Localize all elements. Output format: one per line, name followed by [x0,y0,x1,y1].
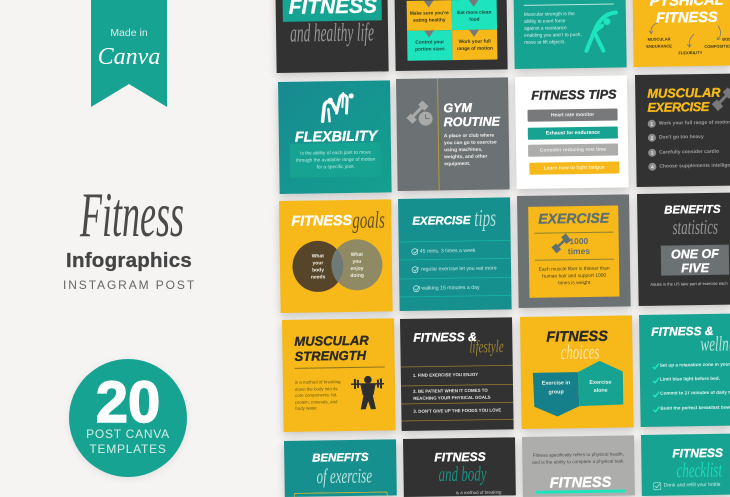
script: lifestyle: lifestyle [470,337,504,357]
body text [532,451,625,465]
body text: protein, minerals, and [295,398,337,404]
heading: gym routine: ROUTINE [444,114,500,129]
quadrant text 1 [410,11,449,23]
tip bar 2 [528,126,618,139]
heading: gym routine [443,101,500,129]
subtitle: Instagram Post: INSTAGRAM POST [63,278,196,292]
title: Infographics: Infographics [66,249,192,272]
body text: you can go to exercise [444,141,497,146]
panel: fitness and lifestyle [400,317,514,430]
panel: muscular exercise [634,73,730,187]
label: muscular endurance [646,36,672,48]
panel: muscular strength [282,318,395,431]
tip bar 3: Consider reducing rest time [540,146,606,153]
script: and body: and body [438,461,486,486]
divider line [524,4,614,6]
script: tips: tips [474,206,496,232]
list item 1: 1. FIND EXERCISE YOU ENJOY [413,371,478,377]
step markers: 4 [650,164,654,170]
venn text left: What [312,252,324,259]
step markers [648,120,656,171]
stat: 1000 times: 1000 [570,236,589,246]
script: and healthy life: and healthy life [290,18,375,47]
heading: flexibility: FLEXBILITY [295,128,377,145]
quadrant text 3: Control your [416,40,445,46]
heading: muscular exercise [647,84,720,115]
tip bar 4 [529,161,619,174]
body text: equipment. [444,162,470,167]
divider [535,232,614,234]
script: goals: goals [352,208,385,234]
panel: fitness and wellness [639,314,730,427]
badge text: POST CANVA [86,426,170,440]
heading: fitness and: FITNESS & [413,329,477,344]
title script: Fitness: Fitness [80,180,184,250]
yellow inner panel [528,206,620,298]
body text: Fitness specifically refers to physical health, [533,451,624,458]
heading: gym routine: GYM [443,101,472,115]
outlined box [294,491,388,496]
panel: physical fitness [632,0,730,67]
body text: A place or club where [444,134,494,139]
checkbox [653,482,662,490]
quadrant pointers [424,0,479,38]
panel: fitness choices [520,315,634,429]
heading: physical fitness [650,0,724,27]
quadrant text 4 [457,39,493,52]
ribbon: Made in Canva [91,0,167,107]
box text: through the available range of motion [296,157,375,163]
badge text: TEMPLATES [89,442,167,456]
quadrant: eating healthy [407,0,452,31]
heading: fitness: FITNESS [546,328,608,345]
body text: move or lift objects. [525,40,566,45]
heading: physical fitness: FITNESS [656,10,718,27]
arrows [648,22,722,48]
tip bar 1: Heart rate monitor [551,111,594,118]
venn text right: What [351,251,363,257]
check icons [411,248,420,292]
venn text left: your [313,260,324,266]
heading: muscular exercise: EXERCISE [647,99,709,115]
venn text left: body [312,267,324,273]
panel: fitness and body [403,437,516,496]
venn text left: needs [311,274,326,280]
body text [524,12,582,45]
heading: fitness: FITNESS [291,212,353,229]
stat: 1000 times: times [568,245,590,256]
heading: fitness: FITNESS [550,474,612,491]
script: statistics: statistics [672,214,718,239]
body text: core components: fat, [295,392,337,397]
venn text right: you [353,258,362,264]
heading: benefits: BENEFITS [312,451,369,464]
body text: Each muscle fiber is thinner than [539,267,610,273]
script: choices: choices [560,339,600,364]
panel: muscular strength definition [513,0,627,69]
panel: Fitness and healthy life [275,0,389,73]
list item 2: REACHING YOUR PHYSICAL GOALS [413,394,491,400]
body text [539,266,610,287]
heading: fitness: FITNESS [434,449,486,464]
box text [296,150,375,170]
panel: flexibility [278,80,392,193]
heading: exercise: EXERCISE [413,214,471,227]
tip bar 2: Exhaust for endurance [546,129,600,136]
tip text 3: walking 15 minutes a day [422,284,480,291]
list item 2 [413,387,491,400]
label: body composition [704,37,730,48]
body text: down the body into its [295,385,337,391]
option: exercise alone: alone [594,387,608,394]
quadrant text 2: Eat more clean [458,11,492,16]
step text 2: Don't go too heavy [658,134,703,140]
quadrant text 1: Make sure you're [410,11,449,17]
label: muscular endurance: MUSCULAR [648,36,671,42]
quadrant: range of motion [452,29,498,60]
checklist item: Drink and refill your bottle [664,482,721,489]
option: exercise in group: Exercise in [542,380,570,386]
body text: against a resistance [524,26,567,31]
body text: ability to exert force [524,19,566,24]
body text: is a method of breaking [455,489,501,495]
stat box: one of five [660,245,729,276]
quadrant text 3 [415,40,445,52]
icon: dumbbell and clock [406,100,432,126]
panel: benefits of exercise [284,439,397,496]
heading: muscular strength: STRENGTH [294,347,366,363]
quadrant text 1: eating healthy [414,18,446,23]
venn text right: enjoy [351,265,364,272]
check marks [652,363,660,413]
icon: dumbbell [552,234,571,254]
heading: muscular strength [294,332,369,363]
badge: 20 post Canva templates [69,358,187,476]
divider [535,259,614,261]
icon: stretching figure [584,10,618,53]
tip bar 4: Learn how to fight fatigue [544,164,605,171]
icon: two stretching figures [320,92,354,124]
body text: enabling you and I to push, [524,32,582,38]
label: muscular endurance: ENDURANCE [647,43,672,48]
heading: muscular strength: MUSCULAR [294,332,368,348]
divider lines [398,240,512,298]
body text: weights, and other [444,155,487,160]
box text: for a specific joint. [317,164,355,170]
panel: gym routine [396,77,510,191]
body text [295,379,340,411]
accent bar [536,489,625,493]
heading: fitness: FITNESS [672,446,723,461]
badge number: 20 [96,370,160,434]
heading: muscular exercise: MUSCULAR [647,84,720,101]
quadrant text 4: Work your full [459,40,491,45]
quadrant: portion sizes [407,30,453,61]
tip bar 3 [528,143,618,156]
option: exercise alone: Exercise [589,379,612,386]
box text: Is the ability of each joint to move [300,150,371,156]
script: of exercise: of exercise [316,463,372,488]
panel: fitness checklist [641,434,730,496]
panel: fitness athletic [522,435,635,497]
heading: fitness tips: FITNESS TIPS [531,87,617,102]
list item 2: Limit blue light before bed. [660,376,720,382]
tip bar 1 [527,108,618,121]
quadrant text 4: range of motion [457,46,493,52]
stat: 1000 times [568,236,590,256]
stat text: FIVE [681,260,709,275]
panel: exercise tips [398,197,512,311]
body text: is a method of breaking [295,379,340,384]
body text: human hair and support 1000 [543,274,606,280]
body text [444,133,497,167]
body text: body water. [295,405,318,410]
quadrant text 2: food [470,17,480,22]
step text 1: Work your full range of motion [658,119,730,126]
text box [290,142,381,177]
heading: exercise: EXERCISE [539,210,610,227]
venn diagram [292,239,382,292]
accent line [436,78,439,190]
panel: fitness goals [279,199,393,312]
badge text [86,426,170,456]
icon: dumbbell [712,88,730,111]
heading band [283,0,382,22]
stat text: ONE OF [671,246,719,261]
icon: weightlifter [350,376,384,410]
panel: benefits statistics [637,193,730,306]
hexagon shapes [532,360,624,416]
option: exercise in group [542,380,570,395]
divider [294,366,384,368]
heading: benefits: BENEFITS [664,204,720,217]
divider lines [400,364,514,422]
body text: Muscular strength is the [524,12,575,17]
option: exercise in group: group [548,389,564,395]
step markers: 2 [650,135,653,141]
quadrant text 3: portion sizes [415,47,445,52]
venn text left [311,252,326,280]
stat text [671,246,720,275]
venn text right [350,251,364,279]
step markers: 3 [650,150,653,156]
quadrant text 2 [458,10,492,22]
tip text 1: 45 mins, 3 times a week [420,247,476,254]
quadrant: clean food [452,0,497,30]
step markers: 1 [650,121,653,127]
panel: exercise 1000 times [517,194,631,308]
heading: fitness and: FITNESS & [651,324,714,339]
body text: using machines, [444,148,482,153]
label: flexibility: FLEXIBILITY [679,50,703,55]
panel: four healthy habits [394,0,508,71]
step text 3: Carefully consider cardio [659,148,719,155]
ribbon logo: Canva: Canva [98,44,160,70]
ribbon text: Made in: Made in [110,27,148,39]
tip text 2: regular exercise let you eat more [421,265,497,272]
list item 3: 3. DON'T GIVE UP THE FOODS YOU LOVE [414,407,502,413]
body text: times is weight [559,281,591,287]
script: checklist: checklist [677,457,722,482]
list item 2: 2. BE PATIENT WHEN IT COMES TO [413,387,488,393]
body text: and is the ability to complete a physical task. [532,458,625,465]
panel: fitness tips [515,75,629,188]
option: exercise alone [589,379,612,394]
venn text right: doing [351,273,364,279]
